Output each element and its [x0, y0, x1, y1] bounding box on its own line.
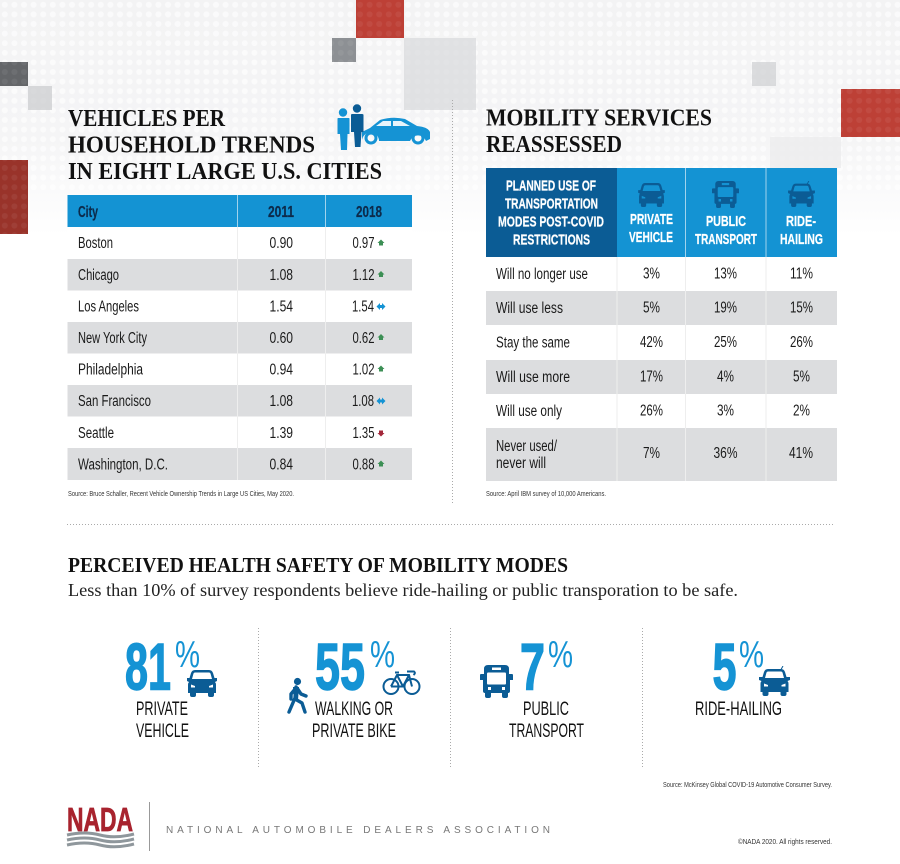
- table: vehicles per household: [68, 195, 412, 480]
- row: stay the same: [496, 334, 813, 352]
- row: will use more: 17%: [640, 368, 663, 386]
- row: New York City: New York City: [78, 330, 147, 347]
- table header: PLANNED USE OF: [506, 178, 596, 194]
- stat: private vehicle: [125, 630, 217, 742]
- stat: private vehicle: VEHICLE: [136, 720, 189, 742]
- table header: [486, 168, 837, 257]
- stat: ride-hailing: %: [739, 634, 764, 676]
- row: Washington, D.C.: 0.88: [352, 456, 374, 474]
- stat: walking or private bike: 55: [315, 630, 365, 704]
- row backgrounds: [68, 227, 412, 480]
- row: will use only: 26%: [640, 402, 663, 420]
- row: will use less: [496, 300, 813, 317]
- heading: vehicles per household: VEHICLES PER: [68, 106, 226, 132]
- row: Seattle: [78, 425, 384, 442]
- table header row: 2018: [356, 204, 382, 221]
- row: Los Angeles: 1.54: [270, 298, 293, 316]
- row: Washington, D.C.: Washington, D.C.: [78, 456, 168, 474]
- row: will use more: 4%: [717, 368, 734, 386]
- vertical divider between tables: [452, 100, 454, 505]
- row: will use only: 2%: [793, 402, 810, 420]
- row: New York City: 0.60: [270, 330, 293, 347]
- row: Seattle: 1.35: [352, 425, 374, 442]
- stat: ride-hailing: [695, 630, 790, 720]
- table header: RESTRICTIONS: [513, 232, 590, 248]
- row: Philadelphia: 0.94: [270, 362, 293, 378]
- heading: mobility services: REASSESSED: [486, 132, 622, 158]
- row: will use only: Will use only: [496, 403, 562, 420]
- row: Seattle: 1.39: [270, 425, 293, 442]
- row: will use less: 19%: [714, 300, 737, 316]
- table: mobility services: [486, 168, 837, 481]
- row: Chicago: 1.08: [270, 267, 293, 284]
- row: stay the same: Stay the same: [496, 334, 570, 352]
- row backgrounds: [486, 257, 837, 481]
- logo divider: [148, 802, 150, 851]
- row: Boston: [78, 235, 384, 252]
- row: Boston: 0.90: [270, 235, 293, 252]
- table header: PUBLIC: [706, 213, 746, 230]
- row: will use more: [496, 368, 810, 386]
- row: will use only: [496, 402, 810, 420]
- row: Los Angeles: [78, 298, 386, 316]
- source: mobility table: Source: April IBM survey of 10,000 Americans.: [486, 491, 606, 498]
- column dividers: [258, 628, 642, 768]
- icon: bicycle: [384, 672, 420, 694]
- stat: ride-hailing: RIDE-HAILING: [695, 698, 782, 720]
- decorative squares: [0, 0, 900, 240]
- stat: private vehicle: 81: [125, 630, 171, 704]
- copyright: ©NADA 2020. All rights reserved.: [738, 838, 832, 846]
- heading: vehicles per household: HOUSEHOLD TRENDS: [68, 132, 315, 158]
- row: will use more: 5%: [793, 368, 810, 386]
- row: Seattle: Seattle: [78, 425, 114, 442]
- row: San Francisco: 1.08: [352, 393, 374, 410]
- heading: perceived health safety: PERCEIVED HEALTH SAFETY OF MOBILITY MODES: [68, 553, 568, 577]
- stat: walking or private bike: %: [370, 634, 395, 676]
- row: Boston: Boston: [78, 235, 113, 252]
- table header row: 2011: [268, 204, 294, 221]
- table header: VEHICLE: [629, 229, 673, 246]
- row: Philadelphia: 1.02: [352, 362, 374, 378]
- dotted background texture: [0, 0, 900, 235]
- row: will no longer use: 11%: [790, 266, 813, 282]
- heading: vehicles per household: IN EIGHT LARGE U.S. CITIES: [68, 159, 382, 185]
- row: stay the same: 42%: [640, 334, 663, 351]
- source: health safety: Source: McKinsey Global COVID-19 Automotive Consumer Survey.: [663, 782, 832, 789]
- table header: MODES POST-COVID: [498, 214, 604, 230]
- row: Philadelphia: Philadelphia: [78, 362, 143, 378]
- heading: mobility services: [486, 106, 712, 158]
- row: Philadelphia: [78, 362, 384, 378]
- row: will no longer use: 3%: [643, 266, 660, 282]
- logo: NADA: NADA: [67, 801, 133, 838]
- icon: bus: [480, 665, 513, 698]
- stat: walking or private bike: PRIVATE BIKE: [312, 720, 396, 742]
- table header row: City: [78, 204, 98, 221]
- row: will use more: Will use more: [496, 369, 570, 386]
- row: Los Angeles: 1.54: [352, 298, 374, 316]
- stat: public transport: [480, 630, 584, 742]
- table header: TRANSPORT: [695, 231, 757, 248]
- row: never used: Never used/: [496, 438, 558, 455]
- stat: walking or private bike: [289, 630, 420, 742]
- row: never used: [496, 438, 813, 472]
- table header: TRANSPORTATION: [505, 196, 598, 212]
- row: Washington, D.C.: [78, 456, 384, 474]
- heading: mobility services: MOBILITY SERVICES: [486, 106, 712, 132]
- row: San Francisco: San Francisco: [78, 393, 151, 410]
- table header: HAILING: [780, 231, 823, 248]
- row: will use less: 5%: [643, 300, 660, 316]
- table header: RIDE-: [786, 213, 816, 230]
- association name: NATIONAL AUTOMOBILE DEALERS ASSOCIATION: [166, 825, 550, 836]
- horizontal divider: [67, 524, 835, 526]
- row: Chicago: Chicago: [78, 267, 119, 284]
- row: Boston: 0.97: [352, 235, 374, 252]
- subtitle: Less than 10% of survey respondents believe ride-hailing or public transporation to be safe.: [68, 580, 738, 600]
- icon: car: [187, 670, 217, 697]
- icon: people and car: [338, 104, 430, 150]
- table header: PRIVATE: [630, 211, 673, 228]
- icon: ride-hailing car: [759, 666, 790, 696]
- row: never used: 41%: [789, 445, 813, 462]
- stat: public transport: TRANSPORT: [509, 720, 584, 742]
- row: never used: 7%: [643, 445, 660, 462]
- stat: ride-hailing: 5: [712, 630, 736, 704]
- row: Chicago: [78, 267, 384, 284]
- row: stay the same: 25%: [714, 334, 737, 351]
- stat: private vehicle: %: [175, 634, 200, 676]
- row: New York City: 0.62: [352, 330, 374, 347]
- icon: walking person: [289, 678, 306, 712]
- row: San Francisco: 1.08: [270, 393, 293, 410]
- row: New York City: [78, 330, 384, 347]
- stat: public transport: 7: [520, 630, 545, 704]
- row: Los Angeles: Los Angeles: [78, 298, 139, 316]
- row: Washington, D.C.: 0.84: [270, 456, 293, 474]
- heading: vehicles per household: [68, 106, 382, 185]
- row: Chicago: 1.12: [352, 267, 374, 284]
- table header row: [68, 195, 412, 227]
- stat: walking or private bike: WALKING OR: [315, 698, 393, 720]
- row: will no longer use: 13%: [714, 266, 737, 282]
- row: San Francisco: [78, 393, 386, 410]
- stat: private vehicle: PRIVATE: [136, 698, 188, 720]
- row: will no longer use: Will no longer use: [496, 266, 588, 283]
- stat: public transport: PUBLIC: [523, 698, 569, 720]
- row: will use only: 3%: [717, 402, 734, 420]
- stat: public transport: %: [548, 634, 573, 676]
- row: will no longer use: [496, 266, 813, 283]
- source: vehicles table: Source: Bruce Schaller, Recent Vehicle Ownership Trends in Large US Cities, May 2020.: [68, 491, 294, 498]
- logo: NADA: [67, 801, 134, 847]
- row: stay the same: 26%: [790, 334, 813, 351]
- row: will use less: Will use less: [496, 300, 563, 317]
- row: never used: 36%: [714, 445, 738, 462]
- row: will use less: 15%: [790, 300, 813, 316]
- row: never used: never will: [496, 455, 546, 472]
